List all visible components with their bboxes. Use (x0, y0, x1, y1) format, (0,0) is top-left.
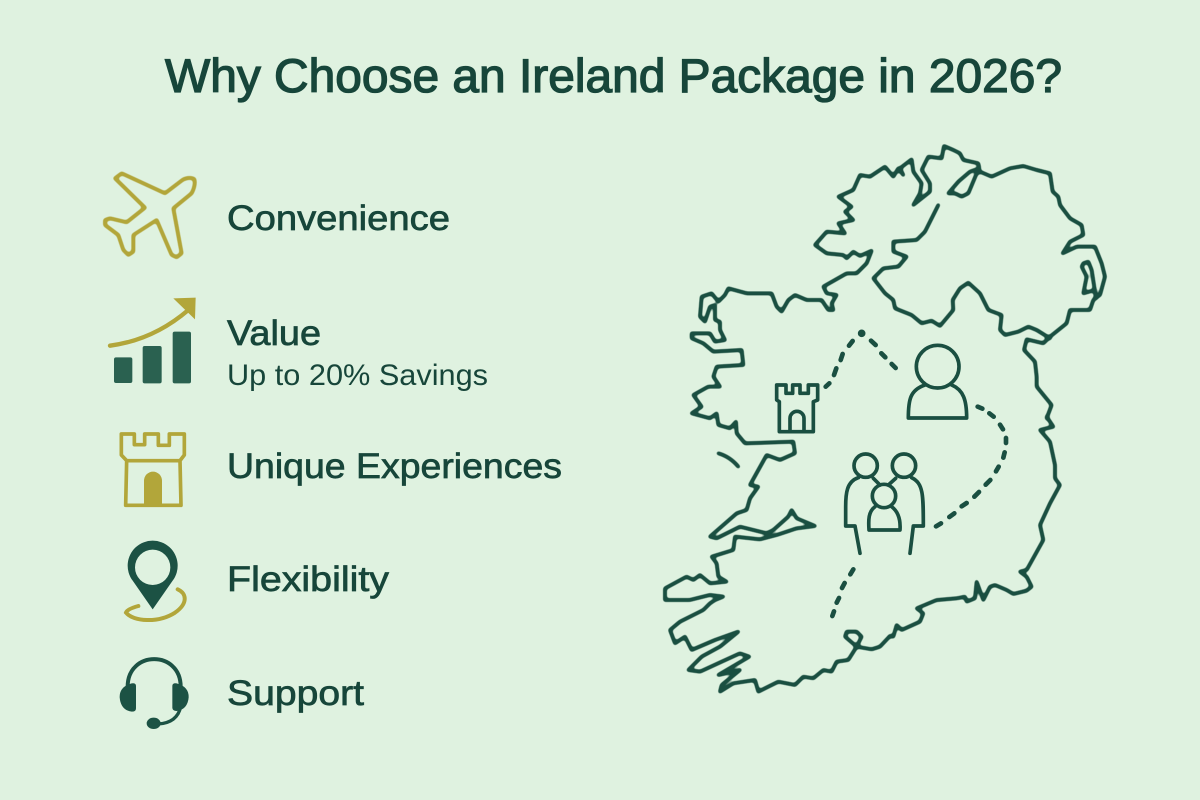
icon: castle (121, 434, 184, 505)
icon: person on map (908, 345, 967, 418)
label: Value: Value (227, 314, 321, 353)
icon: tower on map (777, 385, 818, 432)
title: Why Choose an Ireland Package in 2026? (165, 49, 1062, 102)
icon: headset (120, 659, 189, 729)
coastline (665, 146, 1105, 692)
label: Unique Experiences: Unique Experiences (227, 447, 562, 486)
map of Ireland (665, 146, 1105, 692)
label: Convenience: Convenience (227, 199, 450, 238)
icon: growth chart (110, 298, 196, 383)
label: Flexibility: Flexibility (227, 560, 390, 599)
icon: family on map (846, 454, 923, 553)
icon: location pin (126, 541, 185, 620)
dashed route: family to south coast (832, 569, 853, 616)
dashed route: person to family (936, 407, 1006, 526)
icon: airplane (105, 173, 195, 257)
label: savings: Up to 20% Savings (227, 359, 488, 392)
dashed route: tower to person (826, 331, 896, 387)
label: Support: Support (227, 674, 364, 713)
